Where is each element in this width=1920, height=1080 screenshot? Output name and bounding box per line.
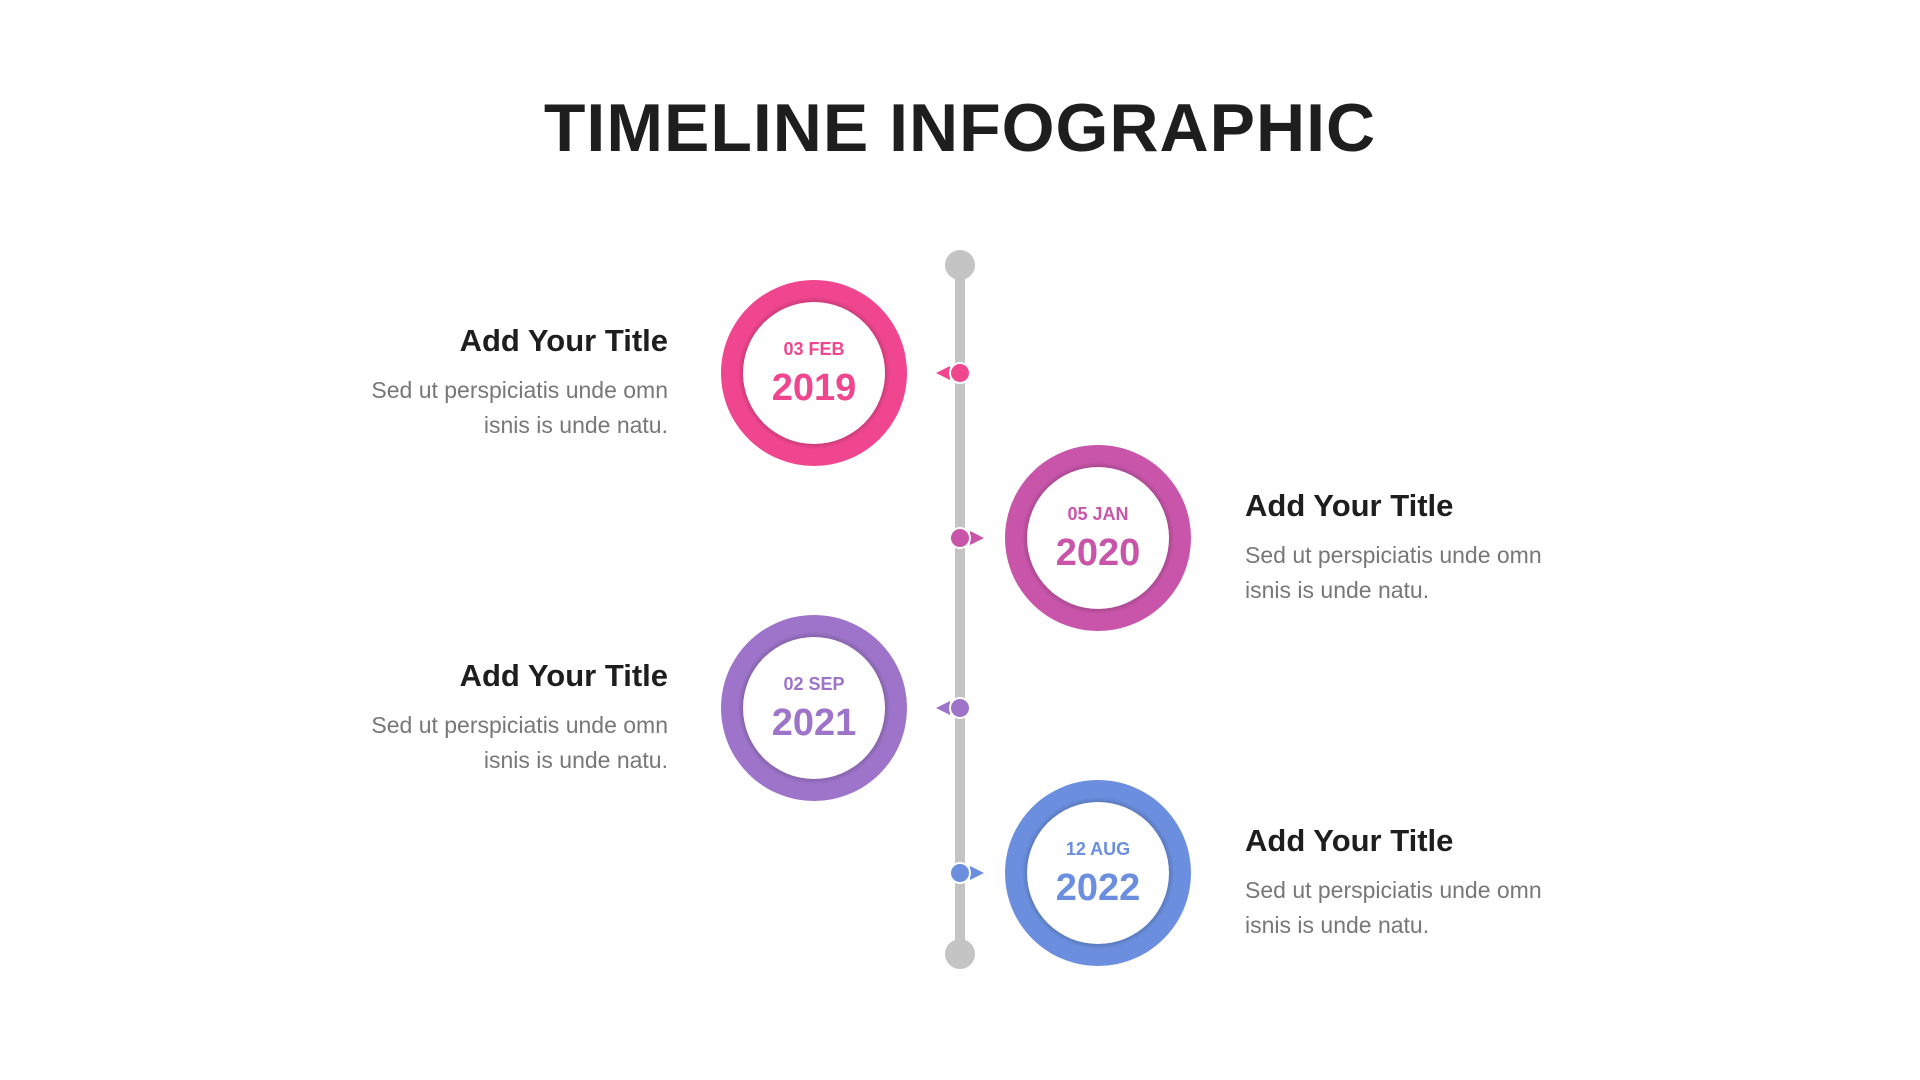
marker 2021 [936, 698, 970, 718]
text block 2021: isnis is unde natu. [484, 747, 668, 773]
milestone 2022 circle [1005, 780, 1191, 966]
title: TIMELINE INFOGRAPHIC [544, 90, 1376, 166]
milestone 2022 circle: 12 AUG [1066, 839, 1130, 859]
text block 2019: Sed ut perspiciatis unde omn [371, 377, 668, 403]
text block 2021 [371, 658, 668, 773]
milestone 2021 circle [721, 615, 907, 801]
text block 2022: isnis is unde natu. [1245, 912, 1429, 938]
vertical line [945, 250, 975, 969]
text block 2020: Sed ut perspiciatis unde omn [1245, 542, 1542, 568]
text block 2022 [1245, 823, 1542, 938]
milestone 2019 circle: 03 FEB [783, 339, 845, 359]
milestone 2020 circle: 2020 [1056, 532, 1140, 574]
text block 2021: Sed ut perspiciatis unde omn [371, 712, 668, 738]
milestone 2019 circle: 2019 [772, 367, 856, 409]
text block 2022: Sed ut perspiciatis unde omn [1245, 877, 1542, 903]
text block 2019 [371, 323, 668, 438]
text block 2020 [1245, 488, 1542, 603]
marker 2020 [950, 528, 984, 548]
text block 2019: isnis is unde natu. [484, 412, 668, 438]
marker 2019 [936, 363, 970, 383]
text block 2020: isnis is unde natu. [1245, 577, 1429, 603]
milestone 2020 circle [1005, 445, 1191, 631]
milestone 2020 circle: 05 JAN [1067, 504, 1129, 524]
milestone 2021 circle: 2021 [772, 702, 856, 744]
text block 2022: Add Your Title [1245, 823, 1453, 858]
text block 2021: Add Your Title [460, 658, 668, 693]
milestone 2019 circle [721, 280, 907, 466]
milestone 2022 circle: 2022 [1056, 867, 1140, 909]
text block 2019: Add Your Title [460, 323, 668, 358]
marker 2022 [950, 863, 984, 883]
milestone 2021 circle: 02 SEP [783, 674, 845, 694]
text block 2020: Add Your Title [1245, 488, 1453, 523]
